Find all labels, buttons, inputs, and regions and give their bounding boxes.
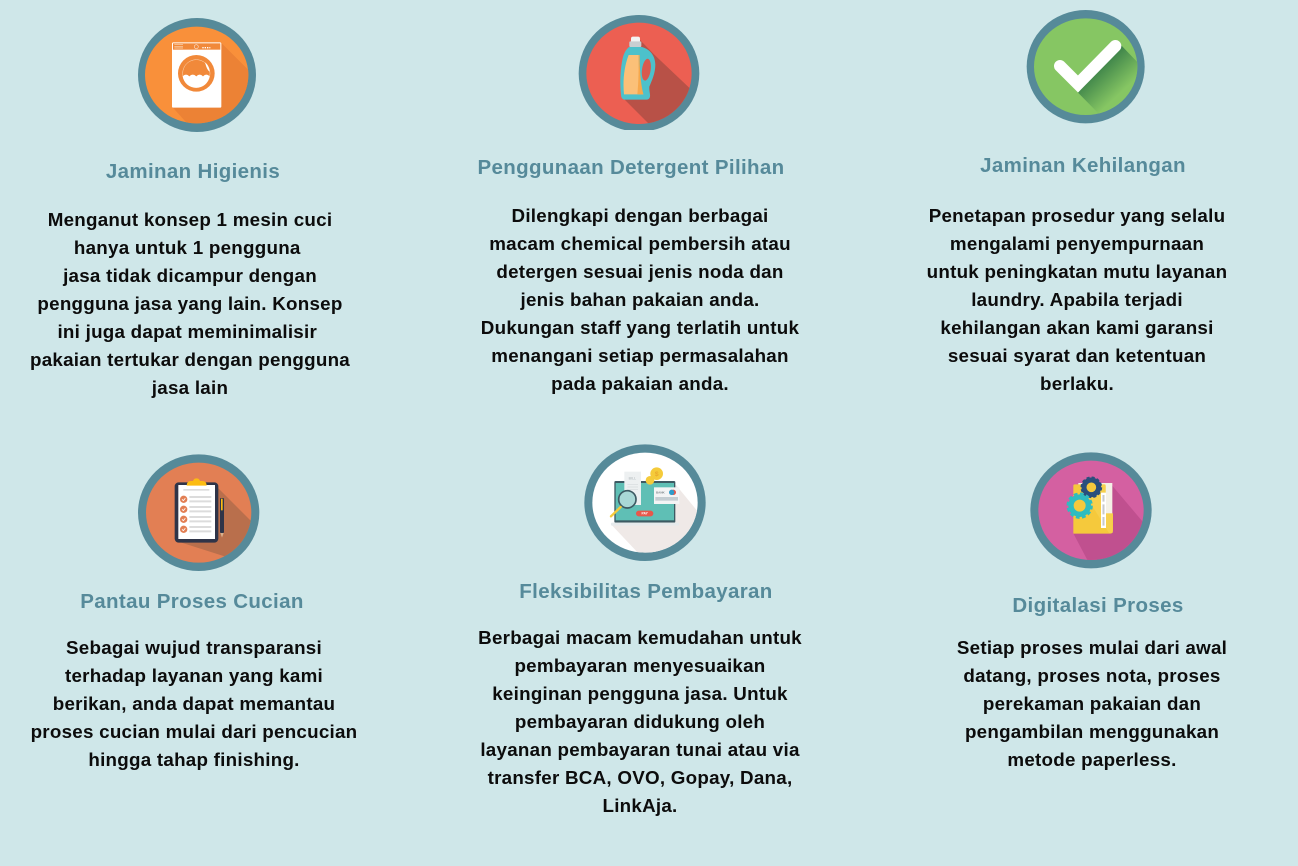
text block: Sebagai wujud transparansi (66, 637, 322, 658)
text block: layanan pembayaran tunai atau via (480, 739, 800, 760)
panel: Pantau Proses Cucian (31, 454, 357, 770)
text block (957, 637, 1227, 770)
text block: LinkAja. (602, 795, 678, 816)
text block: transfer BCA, OVO, Gopay, Dana, (488, 767, 792, 788)
text block (31, 637, 357, 770)
text block: berlaku. (1040, 373, 1114, 394)
icon: washing machine (138, 18, 256, 132)
text block (30, 209, 350, 398)
icon: laptop payment: PAY (642, 512, 649, 516)
text block: pembayaran didukung oleh (515, 711, 765, 732)
icon: laptop payment: BANK (656, 490, 665, 494)
text block: Penetapan prosedur yang selalu (929, 205, 1225, 226)
text block: Dukungan staff yang terlatih untuk (481, 317, 799, 338)
title: Digitalasi Proses (1012, 594, 1184, 617)
title: Penggunaan Detergent Pilihan (477, 156, 785, 179)
text block: hanya untuk 1 pengguna (74, 237, 301, 258)
icon: folder with gears (1030, 452, 1152, 568)
text block: macam chemical pembersih atau (489, 233, 791, 254)
text block: Setiap proses mulai dari awal (957, 637, 1227, 658)
icon: laptop payment: $ (655, 471, 659, 478)
panel: Fleksibilitas Pembayaran (478, 444, 802, 816)
text block: jasa tidak dicampur dengan (63, 265, 317, 286)
title: Jaminan Higienis (106, 160, 280, 183)
panel: Jaminan Kehilangan (927, 10, 1227, 394)
text block: proses cucian mulai dari pencucian (31, 721, 357, 742)
text block (481, 205, 799, 394)
text block: kehilangan akan kami garansi (940, 317, 1214, 338)
text block: keinginan pengguna jasa. Untuk (492, 683, 788, 704)
text block: pakaian tertukar dengan pengguna (30, 349, 350, 370)
text block: pengguna jasa yang lain. Konsep (37, 293, 343, 314)
text block: hingga tahap finishing. (88, 749, 300, 770)
panel: Jaminan Higienis (30, 18, 350, 398)
title: Jaminan Kehilangan (980, 154, 1186, 177)
icon: check mark (1026, 10, 1145, 124)
text block: sesuai syarat dan ketentuan (948, 345, 1206, 366)
text block: pada pakaian anda. (551, 373, 729, 394)
panel: Penggunaan Detergent Pilihan (477, 15, 799, 394)
text block: perekaman pakaian dan (983, 693, 1201, 714)
text block: berikan, anda dapat memantau (53, 693, 335, 714)
icon: detergent bottle (578, 15, 700, 130)
text block: Berbagai macam kemudahan untuk (478, 627, 802, 648)
text block (927, 205, 1227, 394)
text block: laundry. Apabila terjadi (971, 289, 1183, 310)
text block: ini juga dapat meminimalisir (57, 321, 317, 342)
text block: jenis bahan pakaian anda. (520, 289, 760, 310)
text block: Menganut konsep 1 mesin cuci (48, 209, 332, 230)
text block: menangani setiap permasalahan (491, 345, 789, 366)
text block: untuk peningkatan mutu layanan (927, 261, 1227, 282)
title: Fleksibilitas Pembayaran (519, 580, 773, 603)
icon: laptop payment: BILL (629, 477, 636, 481)
text block: pengambilan menggunakan (965, 721, 1219, 742)
text block: terhadap layanan yang kami (65, 665, 323, 686)
text block: metode paperless. (1007, 749, 1177, 770)
text block: datang, proses nota, proses (963, 665, 1221, 686)
text block (478, 627, 802, 816)
text block: pembayaran menyesuaikan (514, 655, 766, 676)
icon: laptop payment (584, 444, 706, 561)
title: Pantau Proses Cucian (80, 590, 304, 613)
text block: detergen sesuai jenis noda dan (496, 261, 784, 282)
text block: mengalami penyempurnaan (950, 233, 1204, 254)
panel: Digitalasi Proses (957, 452, 1227, 770)
text block: jasa lain (152, 377, 228, 398)
icon: clipboard checklist (138, 454, 260, 571)
text block: Dilengkapi dengan berbagai (512, 205, 768, 226)
